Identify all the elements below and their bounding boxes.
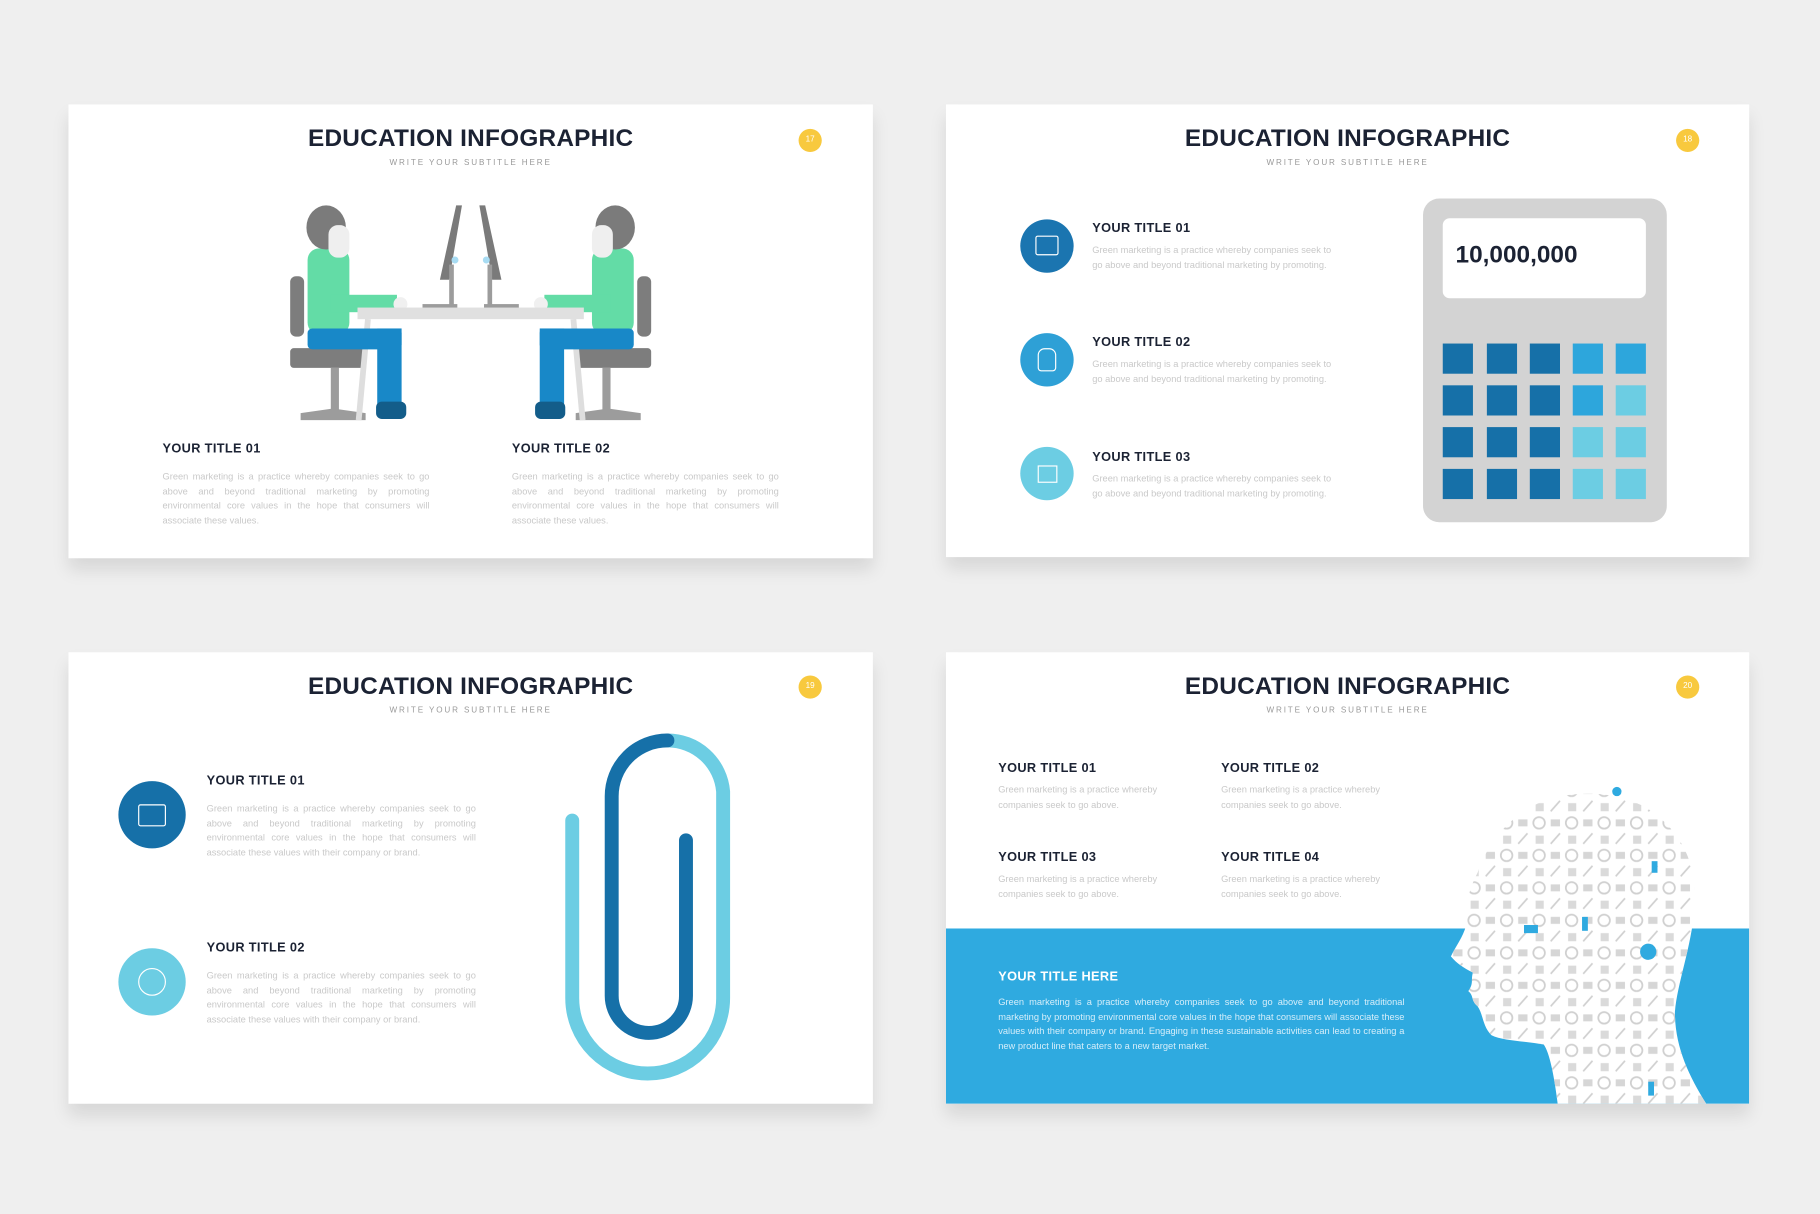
badge 17 xyxy=(799,129,822,152)
text block 03: YOUR TITLE 03 xyxy=(998,851,1096,865)
badge 17: 17 xyxy=(806,136,815,144)
text block 04 xyxy=(1221,851,1380,899)
text block: title 02 xyxy=(512,442,779,526)
icon: globe book xyxy=(118,948,186,1016)
icon: school xyxy=(1020,447,1074,500)
text block 02: Green marketing is a practice whereby companies seek to go above and beyond traditional marketing by promoting environmental core values in the hope that consumers will associate these values with their company or brand. xyxy=(207,970,476,1025)
panel: slide 19 paperclip xyxy=(68,652,873,1104)
heading: EDUCATION INFOGRAPHIC xyxy=(308,125,633,152)
heading: EDUCATION INFOGRAPHIC xyxy=(1185,125,1510,152)
text block 02: YOUR TITLE 02 xyxy=(1221,761,1319,775)
paperclip xyxy=(565,734,730,1080)
text block 02: YOUR TITLE 02 xyxy=(1092,335,1190,349)
text block 01 xyxy=(1092,222,1331,270)
text block: title 02: YOUR TITLE 02 xyxy=(512,442,610,456)
text block 04: YOUR TITLE 04 xyxy=(1221,851,1319,865)
icon: owl book xyxy=(118,781,186,848)
display xyxy=(1443,218,1646,298)
text block 02 xyxy=(1092,335,1331,384)
text block: title here: YOUR TITLE HERE xyxy=(998,970,1118,984)
text block 03: Green marketing is a practice whereby companies seek to go above and beyond traditional marketing by promoting. xyxy=(1092,474,1331,499)
text block 01: YOUR TITLE 01 xyxy=(1092,222,1190,236)
text block 01: YOUR TITLE 01 xyxy=(207,774,305,788)
text block 02 xyxy=(206,941,476,1025)
text block 01: Green marketing is a practice whereby companies seek to go above and beyond traditional marketing by promoting environmental core values in the hope that consumers will associate these values with their company or brand. xyxy=(207,803,476,857)
badge 18: 18 xyxy=(1683,136,1692,144)
text block 01: Green marketing is a practice whereby companies seek to go above and beyond traditional marketing by promoting. xyxy=(1092,245,1331,270)
subtitle: WRITE YOUR SUBTITLE HERE xyxy=(390,707,552,715)
heading: EDUCATION INFOGRAPHIC xyxy=(308,673,633,700)
badge 19 xyxy=(799,675,822,699)
icon: certificate xyxy=(1020,219,1074,273)
subtitle: WRITE YOUR SUBTITLE HERE xyxy=(1266,159,1429,167)
text block 02 xyxy=(1221,761,1380,810)
text block: title 02: Green marketing is a practice whereby companies seek to go above and beyond traditional marketing by promoting environmental core values in the hope that consumers will associate these values. xyxy=(512,471,779,526)
head silhouette with icons xyxy=(1450,786,1706,1104)
heading: EDUCATION INFOGRAPHIC xyxy=(1185,673,1510,700)
text block 02: Green marketing is a practice whereby companies seek to go above and beyond traditional marketing by promoting. xyxy=(1092,359,1331,384)
illustration: two people at desk xyxy=(290,205,652,420)
subtitle: WRITE YOUR SUBTITLE HERE xyxy=(390,159,552,167)
text block 03 xyxy=(998,851,1157,899)
badge 18 xyxy=(1676,129,1699,152)
text block: title here: Green marketing is a practice whereby companies seek to go above and beyond traditional marketing by promoting environmental core values in the hope that consumers will associate these values with their company or brand. Engaging in these sustainable activities can lead to creating a new product line that caters to a new target market. xyxy=(998,997,1404,1051)
keypad xyxy=(1442,344,1646,500)
text block 03: YOUR TITLE 03 xyxy=(1092,450,1190,464)
text block 01: Green marketing is a practice whereby companies seek to go above. xyxy=(998,785,1157,810)
text block 04: Green marketing is a practice whereby companies seek to go above. xyxy=(1221,874,1380,899)
text block 03 xyxy=(1092,450,1331,499)
badge 20 xyxy=(1676,675,1699,699)
icon: hands xyxy=(1020,333,1074,386)
text block: title here xyxy=(998,970,1404,1051)
badge 20: 20 xyxy=(1683,682,1692,691)
display: 10,000,000 xyxy=(1456,241,1578,268)
blue band xyxy=(946,928,1749,1104)
text block 01: YOUR TITLE 01 xyxy=(998,761,1096,775)
text block: title 01: Green marketing is a practice whereby companies seek to go above and beyond traditional marketing by promoting environmental core values in the hope that consumers will associate these values. xyxy=(162,471,429,526)
text block: title 01: YOUR TITLE 01 xyxy=(162,442,261,456)
panel: slide 17 desk scene xyxy=(68,104,873,558)
calculator xyxy=(1423,198,1667,522)
text block 03: Green marketing is a practice whereby companies seek to go above. xyxy=(998,874,1157,899)
text block 01 xyxy=(998,761,1157,810)
text block 01 xyxy=(206,774,476,858)
text block 02: Green marketing is a practice whereby companies seek to go above. xyxy=(1221,785,1380,810)
text block 02: YOUR TITLE 02 xyxy=(207,941,305,955)
text block: title 01 xyxy=(162,442,429,526)
panel: slide 20 head xyxy=(946,652,1749,1104)
badge 19: 19 xyxy=(806,682,815,691)
subtitle: WRITE YOUR SUBTITLE HERE xyxy=(1266,707,1429,715)
panel: slide 18 calculator xyxy=(946,104,1749,557)
